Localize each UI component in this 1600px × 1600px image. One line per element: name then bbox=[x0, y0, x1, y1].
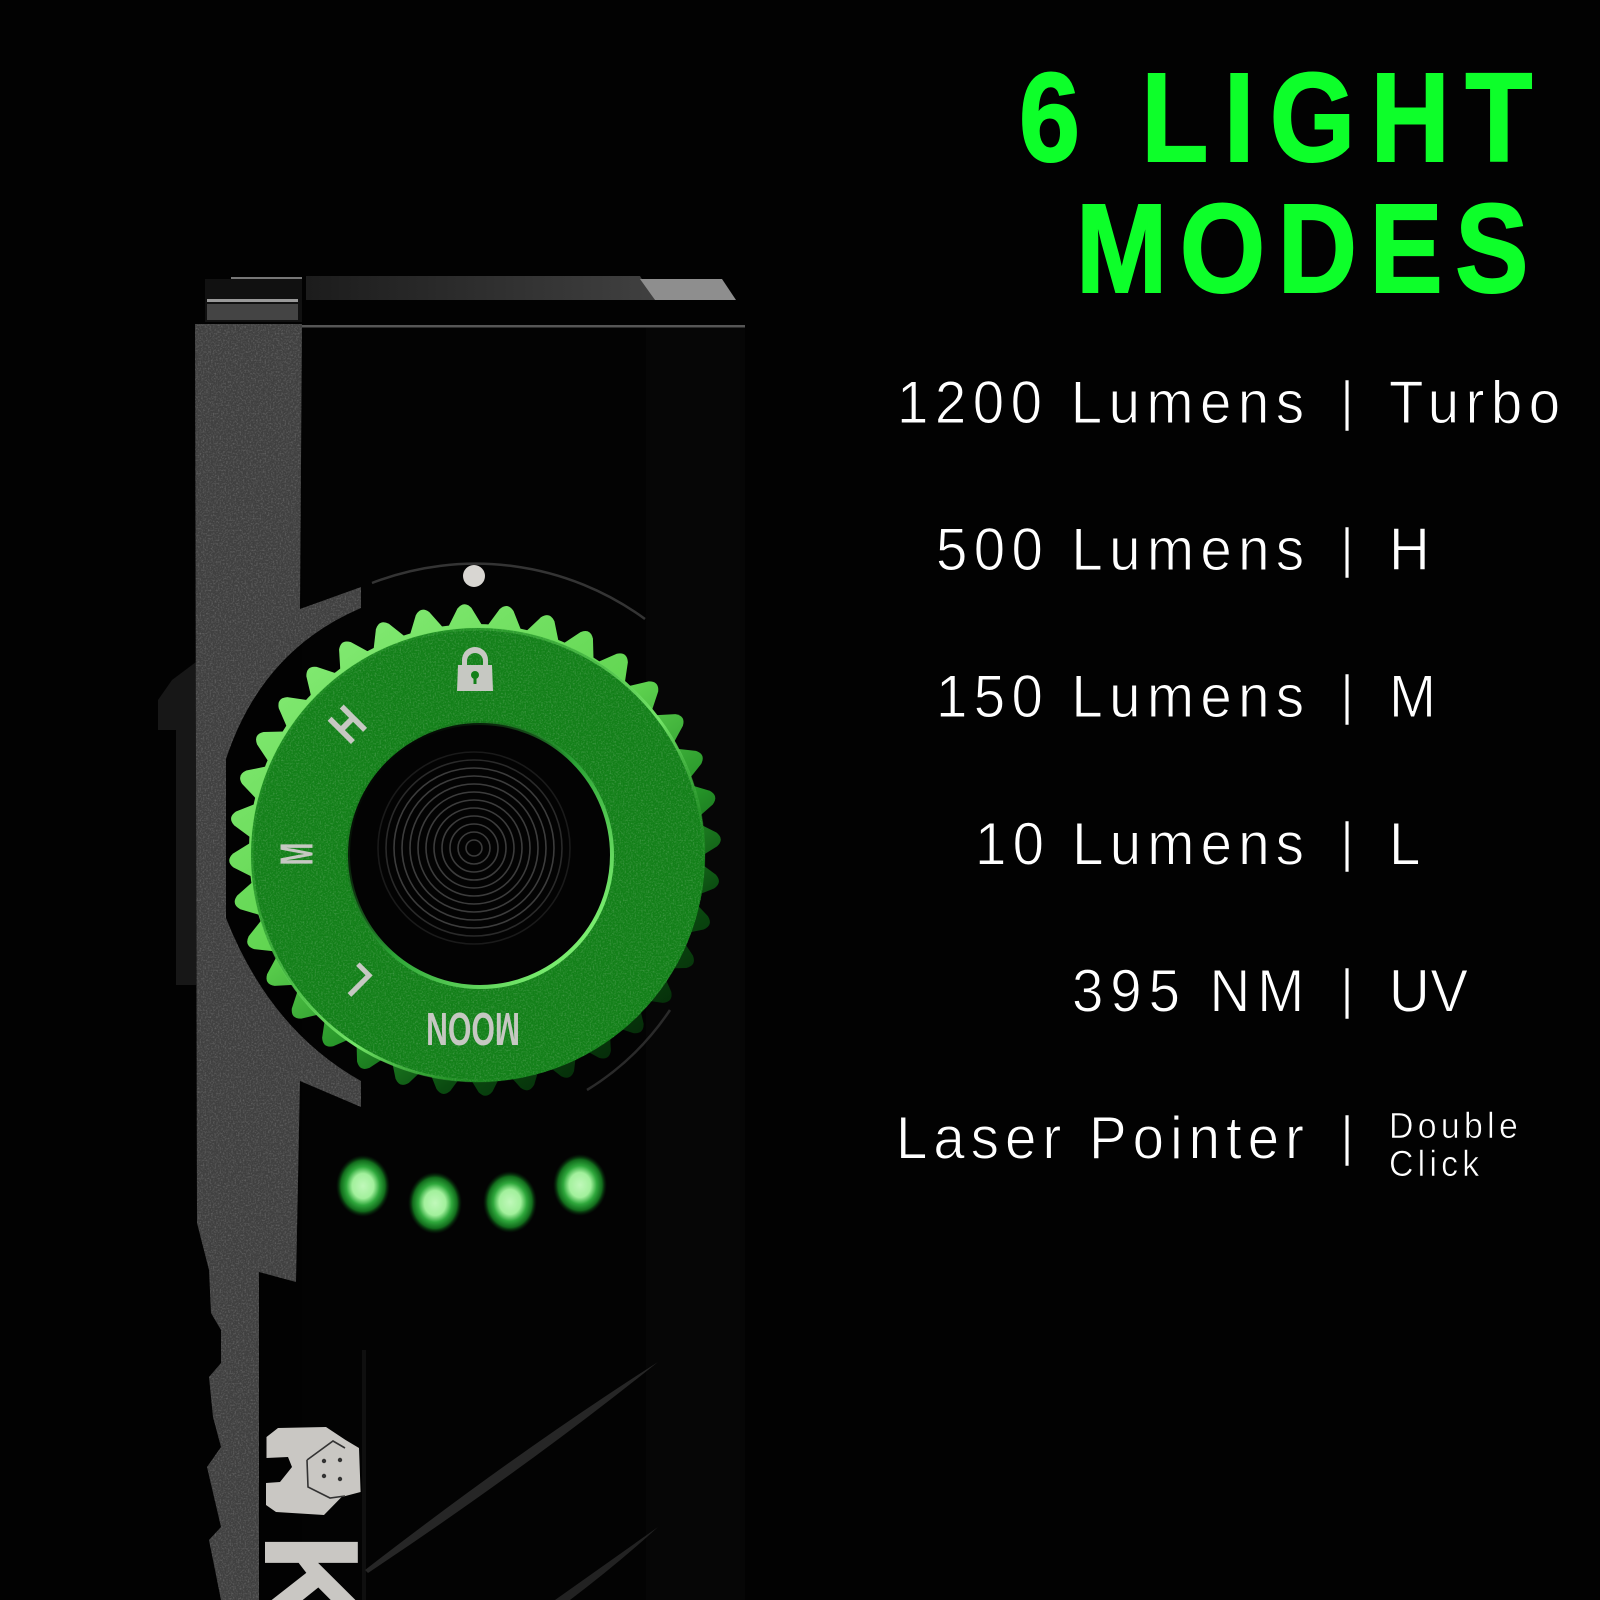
mode list bbox=[896, 369, 1560, 1184]
mode: High: | bbox=[1340, 516, 1354, 579]
flashlight device photo bbox=[158, 276, 760, 1600]
mode: Medium: | bbox=[1340, 663, 1354, 726]
title bbox=[1019, 48, 1532, 320]
spiral button bbox=[378, 752, 570, 944]
selector dial bbox=[229, 604, 721, 1096]
body diagonal groove lower bbox=[555, 1527, 658, 1600]
mode: UV: | bbox=[1340, 957, 1354, 1020]
grey clip strip bbox=[195, 324, 361, 1600]
green LED indicators bbox=[336, 1154, 607, 1234]
mode: UV: 395 NM bbox=[1072, 958, 1304, 1025]
body right bevel bbox=[646, 328, 745, 1600]
mode: Laser Pointer: Click bbox=[1389, 1144, 1480, 1184]
mode: Laser Pointer: Double bbox=[1389, 1106, 1518, 1146]
body vertical seam bbox=[362, 1350, 366, 1600]
label L: L bbox=[331, 955, 381, 1005]
mode: Turbo: Turbo bbox=[1389, 369, 1560, 436]
label H: H bbox=[319, 696, 377, 754]
mode: Turbo: 1200 Lumens bbox=[897, 369, 1304, 436]
dial face rim bbox=[252, 629, 704, 1081]
icon: lock bbox=[457, 647, 493, 691]
indicator dot bbox=[463, 565, 485, 587]
brand logo mascot bbox=[266, 1427, 361, 1515]
mode: Laser Pointer bbox=[896, 1104, 1518, 1184]
top cap bbox=[205, 276, 745, 328]
title: MODES bbox=[1076, 179, 1528, 320]
side clip bbox=[158, 662, 196, 985]
dial face bbox=[251, 628, 705, 1082]
mode: High: 500 Lumens bbox=[936, 516, 1304, 583]
title: 6 LIGHT bbox=[1019, 48, 1532, 189]
mode: Medium: 150 Lumens bbox=[936, 663, 1304, 730]
label M: M bbox=[270, 843, 322, 865]
recess arc bottom bbox=[587, 1010, 670, 1090]
mode: UV bbox=[1072, 957, 1468, 1025]
mode: Low: | bbox=[1340, 810, 1354, 873]
button recess and rim bbox=[348, 723, 612, 987]
mode: Laser Pointer: | bbox=[1340, 1104, 1354, 1167]
mode: Low: 10 Lumens bbox=[975, 811, 1304, 878]
body diagonal groove upper bbox=[365, 1362, 658, 1573]
mode: Low: L bbox=[1389, 811, 1420, 878]
mode: High: H bbox=[1389, 516, 1430, 583]
mode: Turbo bbox=[897, 369, 1560, 436]
mode: Turbo: | bbox=[1340, 369, 1354, 432]
mode: UV: UV bbox=[1389, 958, 1468, 1025]
flashlight body bbox=[302, 326, 745, 1600]
label MOON: MOON bbox=[426, 1003, 520, 1055]
recess arc top bbox=[372, 564, 645, 619]
dial teeth bbox=[229, 604, 721, 1096]
mode: Medium: M bbox=[1389, 663, 1436, 730]
mode: Laser Pointer: Laser Pointer bbox=[896, 1105, 1304, 1172]
